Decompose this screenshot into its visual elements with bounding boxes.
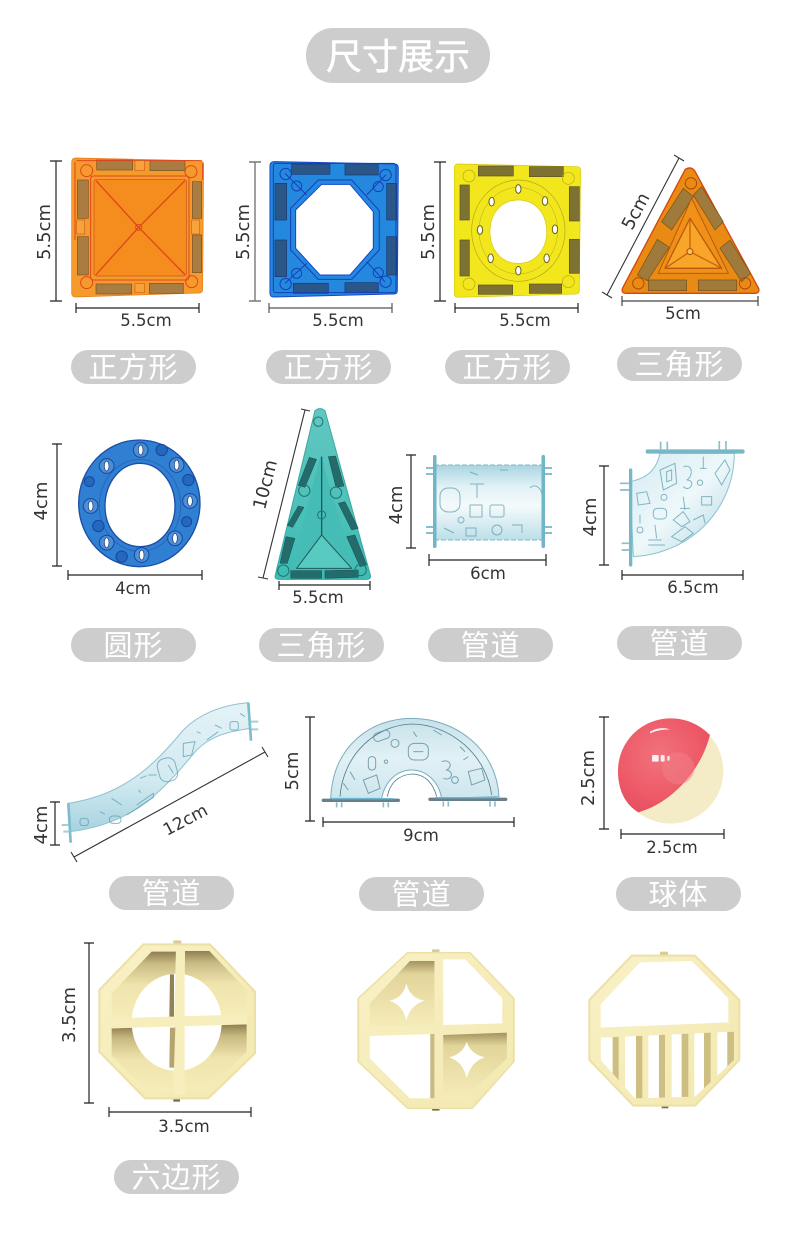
height dimension <box>580 466 609 565</box>
label <box>71 628 196 662</box>
slanted length dimension <box>71 747 268 862</box>
width dimension <box>429 554 546 583</box>
height dimension <box>59 943 94 1103</box>
label <box>259 628 384 662</box>
panel: wavy tube <box>31 703 268 910</box>
height dimension <box>418 162 446 301</box>
width dimension <box>455 303 578 330</box>
label: 正方形 <box>462 352 553 384</box>
height dimension: 5cm <box>282 752 303 790</box>
icon: yellow ring square <box>454 164 581 297</box>
height dimension: 4cm <box>580 498 601 536</box>
height dimension <box>233 162 261 301</box>
height dimension: 4cm <box>31 806 52 844</box>
label: 三角形 <box>276 630 367 662</box>
label: 管道 <box>141 878 202 910</box>
height dimension <box>31 444 62 566</box>
label: 管道 <box>391 878 452 912</box>
label: 管道 <box>460 630 521 662</box>
width dimension <box>269 303 392 330</box>
icon: elbow tube <box>620 441 745 567</box>
width dimension: 5.5cm <box>120 311 172 330</box>
icon: teal triangle <box>275 409 371 579</box>
icon: arch tube <box>322 718 507 807</box>
title <box>306 28 490 83</box>
height dimension <box>282 717 315 821</box>
panel: arch tube <box>282 717 514 912</box>
label: 六边形 <box>131 1162 222 1194</box>
width dimension: 5.5cm <box>312 311 364 330</box>
height dimension: 4cm <box>31 482 52 520</box>
width dimension: 5cm <box>665 304 701 323</box>
label <box>359 877 484 912</box>
title: 尺寸展示 <box>326 36 470 77</box>
width dimension <box>76 303 199 330</box>
panel: blue square tile <box>233 162 398 384</box>
label: 圆形 <box>103 630 164 662</box>
icon: octagon with stars <box>358 949 514 1111</box>
label <box>71 350 196 384</box>
slanted side dimension <box>249 409 310 579</box>
width dimension <box>622 296 758 323</box>
width dimension <box>323 817 514 845</box>
width dimension: 5.5cm <box>292 588 344 607</box>
label: 三角形 <box>634 348 725 382</box>
width dimension: 6cm <box>470 564 506 583</box>
height dimension: 5.5cm <box>418 204 439 260</box>
label <box>445 350 570 384</box>
width dimension: 5.5cm <box>499 311 551 330</box>
panel: straight tube <box>386 455 553 662</box>
width dimension: 4cm <box>115 579 151 598</box>
label: 管道 <box>649 628 710 660</box>
width dimension: 2.5cm <box>646 838 698 857</box>
height dimension <box>386 455 416 548</box>
slanted length dimension: 12cm <box>160 801 211 841</box>
width dimension <box>279 581 370 607</box>
label <box>428 628 553 662</box>
width dimension: 3.5cm <box>158 1117 210 1136</box>
label <box>617 347 742 382</box>
label: 正方形 <box>88 352 179 384</box>
label <box>266 350 391 384</box>
height dimension: 5.5cm <box>233 204 254 260</box>
label: 球体 <box>648 878 709 912</box>
panel: teal triangle tile <box>249 409 384 662</box>
height dimension: 3.5cm <box>59 987 80 1043</box>
panel: yellow square tile <box>418 162 581 384</box>
label <box>114 1160 239 1194</box>
width dimension: 9cm <box>403 826 439 845</box>
panel: ball <box>578 717 741 912</box>
panel: octagon pieces <box>59 940 739 1194</box>
panel: orange square tile <box>34 158 204 384</box>
icon: blue ring <box>79 440 200 567</box>
icon: blue octagon-hole square <box>270 162 398 297</box>
icon: orange square <box>72 158 204 297</box>
height dimension <box>578 717 609 829</box>
icon: wavy tube <box>62 703 258 843</box>
label: 正方形 <box>283 352 374 384</box>
icon: octagon with circle <box>99 940 255 1102</box>
icon: orange triangle <box>622 168 759 293</box>
slanted side dimension: 5cm <box>618 189 655 234</box>
icon: straight tube <box>426 455 552 548</box>
label <box>617 626 742 660</box>
label <box>109 876 234 910</box>
panel: elbow tube <box>580 441 745 660</box>
height dimension: 4cm <box>386 486 407 524</box>
label <box>616 877 741 912</box>
icon: red and cream ball <box>618 718 723 824</box>
panel: blue ring tile <box>31 440 202 662</box>
panel: orange triangle tile <box>602 155 759 382</box>
height dimension <box>34 161 62 301</box>
slanted side dimension: 10cm <box>249 458 282 512</box>
height dimension: 2.5cm <box>578 750 599 806</box>
width dimension: 6.5cm <box>667 578 719 597</box>
icon: octagon with slots <box>589 952 739 1108</box>
width dimension <box>109 1107 251 1136</box>
height dimension: 5.5cm <box>34 204 55 260</box>
width dimension <box>68 570 202 598</box>
width dimension <box>621 829 724 857</box>
slanted side dimension <box>602 155 684 298</box>
height dimension <box>31 802 60 845</box>
width dimension <box>622 570 743 597</box>
